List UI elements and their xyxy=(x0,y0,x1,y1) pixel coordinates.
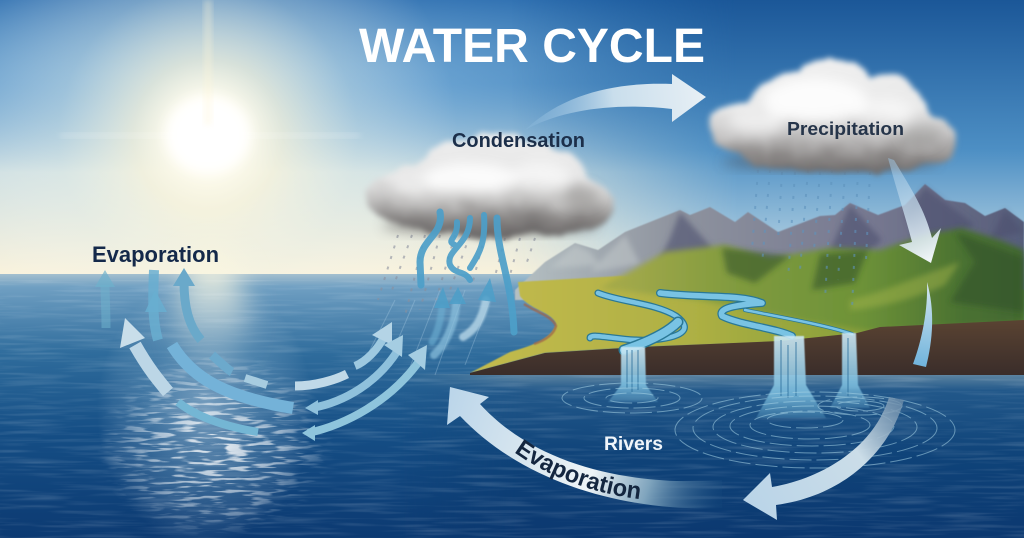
title: WATER CYCLE xyxy=(359,20,705,73)
rain under condensation cloud xyxy=(378,235,535,320)
arrow: lower right curved xyxy=(743,397,904,520)
label: evaporation: Evaporation xyxy=(92,242,219,267)
cloud: precipitation xyxy=(706,57,955,172)
arrow: precipitation to mountains xyxy=(888,158,941,367)
brown coast fringe xyxy=(524,304,556,344)
yellow-green land plain xyxy=(470,262,1024,373)
evaporation arrow heads xyxy=(95,268,427,441)
mountains xyxy=(515,184,1024,300)
icon: sun with glow xyxy=(0,0,458,385)
arrow: evaporation curved with label xyxy=(447,387,712,508)
evaporation arrows: left group xyxy=(105,270,420,433)
ocean rain streaks xyxy=(365,290,490,380)
label: rivers: Rivers xyxy=(604,434,663,455)
rivers xyxy=(590,293,852,350)
green hills xyxy=(600,228,1024,332)
curved evaporation label: Evaporation xyxy=(515,439,640,499)
wavy condensation streams xyxy=(420,212,514,332)
upward arrows under cloud xyxy=(432,278,496,355)
cloud: condensation xyxy=(366,129,619,235)
label: precipitation: Precipitation xyxy=(787,119,904,139)
ocean xyxy=(0,253,1024,538)
brown cliff xyxy=(470,320,1024,375)
label: condensation: Condensation xyxy=(452,130,585,152)
sky background xyxy=(0,0,1024,300)
rain under precipitation cloud xyxy=(752,170,870,310)
arrow: condensation to precipitation xyxy=(525,74,706,130)
waterfalls and ripples xyxy=(562,333,955,468)
